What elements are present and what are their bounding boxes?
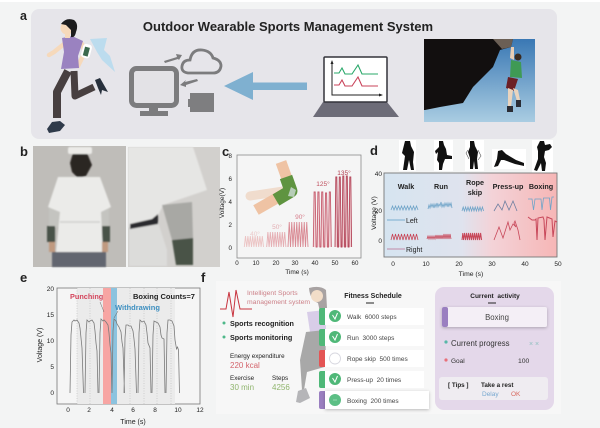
axis ticks and labels: 8 <box>229 153 233 160</box>
legend: Left <box>406 218 418 225</box>
axis ticks and labels: Voltage (V) <box>37 328 44 362</box>
axis ticks and labels: 0 <box>229 245 233 252</box>
axis ticks and labels: 0 <box>391 261 395 268</box>
panel label f: f <box>201 270 206 285</box>
axis ticks and labels: 40 <box>521 261 529 268</box>
punching band <box>103 288 111 404</box>
axis ticks and labels: 0 <box>66 407 70 414</box>
current progress <box>444 339 539 348</box>
icon: upload arrow <box>164 54 182 63</box>
panel label d: d <box>370 143 378 158</box>
axis ticks and labels: Time (s) <box>120 419 146 426</box>
panel a: outdoor wearable sports management system <box>20 9 557 139</box>
axis ticks and labels: 0 <box>50 390 54 397</box>
axis ticks and labels: 20 <box>455 261 463 268</box>
activity labels: Walk <box>398 182 414 191</box>
row: rope skip <box>319 350 424 367</box>
axis ticks and labels: 2 <box>229 222 233 229</box>
axis ticks and labels: 20 <box>375 208 382 215</box>
activity labels: Run <box>434 182 448 191</box>
panel label b: b <box>20 144 28 159</box>
app name: Intelligent Sports <box>247 290 298 297</box>
photo: side view of arm sleeve <box>128 147 220 267</box>
axis ticks and labels: 20 <box>47 286 54 293</box>
axis ticks and labels: 10 <box>174 407 182 414</box>
activity labels <box>398 178 553 197</box>
row: boxing: Boxing 200 times <box>347 398 399 405</box>
right-arm signals <box>391 217 557 240</box>
chart e: boxing voltage trace: Withdrawing <box>115 303 160 312</box>
icon: download arrow <box>180 79 198 87</box>
row: run <box>319 329 424 346</box>
axis ticks and labels: 4 <box>229 199 233 206</box>
axis ticks and labels: 6 <box>229 176 233 183</box>
axis ticks and labels: 0 <box>378 238 382 245</box>
axis ticks and labels: 0 <box>235 260 239 267</box>
illustration: woman exercising <box>296 287 328 403</box>
axis ticks and labels <box>37 286 204 426</box>
activity labels: Boxing <box>529 182 553 191</box>
goal: 100 <box>518 358 530 365</box>
axis ticks and labels <box>219 153 359 276</box>
row: press-up: Press-up 20 times <box>347 377 402 384</box>
tips box: Delay <box>482 391 499 398</box>
current activity name: Boxing <box>485 313 509 322</box>
energy expenditure: 4256 <box>272 383 290 392</box>
chart c: voltage versus bending angle <box>219 153 361 276</box>
card: current activity <box>435 287 554 410</box>
angle labels <box>250 169 351 238</box>
row: boxing <box>319 391 429 409</box>
axis ticks and labels: 50 <box>332 260 339 267</box>
angle labels: 135° <box>337 169 351 177</box>
icon: cloud <box>182 50 221 73</box>
axis ticks and labels: Voltage (V) <box>371 196 378 230</box>
row: rope skip: Rope skip 500 times <box>347 356 408 363</box>
axis ticks and labels: 2 <box>87 407 91 414</box>
axis ticks and labels: 15 <box>47 312 54 319</box>
energy expenditure: Exercise <box>230 375 255 382</box>
activity labels: skip <box>468 188 483 197</box>
angle labels: 40° <box>250 230 260 238</box>
current progress: Current progress <box>451 339 510 348</box>
chart d: voltage for five activities <box>371 140 562 278</box>
annotations: Punching <box>70 292 103 301</box>
axis ticks and labels: 6 <box>131 407 135 414</box>
energy expenditure: Steps <box>272 375 288 382</box>
silhouettes of activities <box>399 140 553 173</box>
panel label e: e <box>20 270 27 285</box>
energy expenditure: 30 min <box>230 383 254 392</box>
row: walk <box>319 308 424 325</box>
photo: rock climber <box>424 39 535 122</box>
feature list <box>222 319 294 342</box>
icon: computer monitor <box>132 68 176 116</box>
axis ticks and labels: 10 <box>253 260 260 267</box>
angle labels: 50° <box>272 223 282 231</box>
panel label a: a <box>20 9 28 23</box>
card: current activity: Current activity <box>470 293 520 300</box>
icon: arm with elbow sensor <box>250 162 296 210</box>
legend: Right <box>406 247 422 254</box>
axis ticks and labels: 30 <box>488 261 496 268</box>
legend <box>387 218 422 254</box>
angle labels: 90° <box>295 213 305 221</box>
photo: back view wearing sleeves <box>33 146 126 267</box>
axis ticks and labels: 8 <box>153 407 157 414</box>
icon: heartbeat line <box>220 290 252 317</box>
axis ticks and labels: 12 <box>196 407 204 414</box>
icon: circuit module <box>188 93 214 112</box>
chart e: boxing voltage trace <box>37 286 204 426</box>
feature list: Sports recognition <box>230 319 294 328</box>
angle labels: 125° <box>316 180 330 188</box>
current progress: × × <box>529 341 539 348</box>
left-arm signals <box>391 197 554 211</box>
tips box <box>439 377 548 400</box>
chart e: boxing voltage trace: Boxing Counts=7 <box>133 292 195 301</box>
icon: laptop with signal chart <box>313 57 399 117</box>
axis ticks and labels: 20 <box>273 260 280 267</box>
activity labels: Press-up <box>493 182 524 191</box>
axis ticks and labels: 5 <box>50 364 54 371</box>
axis ticks and labels: 10 <box>422 261 430 268</box>
axis ticks and labels: Time (s) <box>285 269 309 276</box>
tips box: Take a rest <box>481 382 514 389</box>
axis ticks and labels: 50 <box>554 261 562 268</box>
goal <box>444 358 530 365</box>
energy expenditure: 220 kcal <box>230 361 260 370</box>
heading: fitness schedule: Fitness Schedule <box>344 293 402 300</box>
axis ticks and labels: 40 <box>375 171 382 178</box>
tips box: OK <box>511 391 521 398</box>
icon: runner with arm sensor <box>47 19 115 133</box>
tips box: [ Tips ] <box>448 382 469 389</box>
big arrow <box>224 72 307 100</box>
panel f: sports management app <box>216 281 561 414</box>
energy expenditure: Energy expenditure <box>230 353 285 360</box>
axis ticks and labels: 10 <box>47 338 54 345</box>
axis ticks and labels: 30 <box>292 260 299 267</box>
row: run: Run 3000 steps <box>347 335 395 342</box>
axis ticks and labels: 4 <box>110 407 114 414</box>
axis ticks and labels: Time (s) <box>459 271 483 278</box>
energy expenditure <box>230 353 290 392</box>
voltage curve <box>70 319 180 393</box>
panel label c: c <box>222 144 229 159</box>
row: press-up <box>319 371 424 388</box>
axis ticks and labels: Voltage(V) <box>219 188 226 218</box>
goal: Goal <box>451 358 465 365</box>
withdrawing band <box>111 288 117 404</box>
row: walk: Walk 6000 steps <box>347 314 397 321</box>
title: Outdoor Wearable Sports Management System <box>143 19 433 34</box>
app name: management system <box>247 299 310 306</box>
axis ticks and labels: 60 <box>352 260 359 267</box>
axis ticks and labels <box>371 171 562 278</box>
axis ticks and labels: 40 <box>312 260 319 267</box>
feature list: Sports monitoring <box>230 333 292 342</box>
activity labels: Rope <box>466 178 484 187</box>
